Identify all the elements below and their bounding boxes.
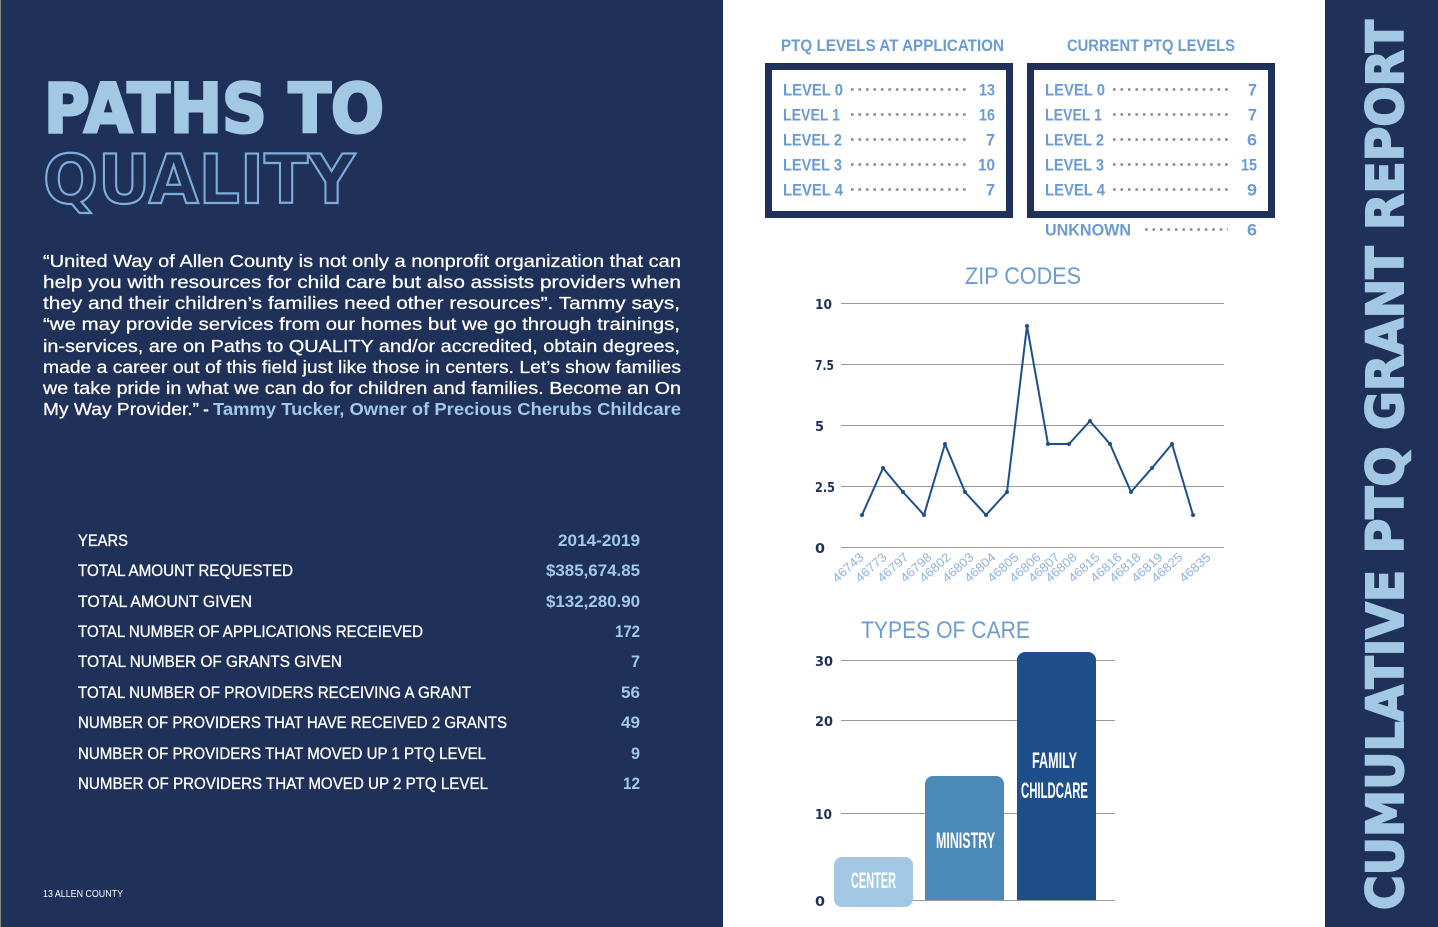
line chart: zip codes: 46798 — [898, 550, 935, 585]
panel: PTQ levels at application — [768, 37, 1010, 214]
panel: current PTQ levels: 7 — [1248, 82, 1257, 100]
title — [43, 70, 384, 220]
statistics table: 7 — [631, 653, 640, 671]
line chart: zip codes: 46773 — [853, 550, 890, 585]
line chart: zip codes — [815, 297, 1224, 585]
statistics table: 9 — [631, 745, 640, 763]
bar: family childcare: CHILDCARE — [1021, 778, 1088, 803]
bar chart: types of care — [815, 652, 1115, 910]
panel: PTQ levels at application: LEVEL 4 — [783, 182, 844, 200]
panel: PTQ levels at application: 10 — [978, 156, 995, 174]
panel: current PTQ levels: 7 — [1248, 106, 1257, 124]
line chart: zip codes: 0 — [815, 541, 825, 557]
line chart: zip codes: 46816 — [1088, 550, 1125, 585]
line chart: zip codes: 46818 — [1107, 550, 1144, 585]
line chart: zip codes: 5 — [815, 419, 824, 435]
line chart: zip codes: 7.5 — [815, 358, 834, 374]
panel: PTQ levels at application: 16 — [979, 106, 995, 124]
bar: family childcare — [1017, 652, 1096, 900]
line chart: zip codes: 46802 — [917, 550, 954, 585]
statistics table: NUMBER OF PROVIDERS THAT MOVED UP 1 PTQ LEVEL — [78, 745, 486, 763]
text block: quote: Tammy Tucker, Owner of Precious Cherubs Childcare — [213, 399, 681, 419]
statistics table: 56 — [621, 684, 640, 702]
statistics table: TOTAL NUMBER OF GRANTS GIVEN — [78, 653, 342, 671]
panel: current PTQ levels: LEVEL 2 — [1045, 132, 1104, 150]
line chart: zip codes: 46815 — [1066, 550, 1103, 585]
bar chart: types of care: 20 — [815, 714, 833, 730]
panel: left navy background — [0, 0, 723, 927]
heading: types of care: TYPES OF CARE — [861, 617, 1030, 644]
heading: zip codes: ZIP CODES — [965, 263, 1081, 290]
line chart: zip codes: 10 — [815, 297, 832, 313]
panel: current PTQ levels: LEVEL 0 — [1045, 82, 1105, 100]
text block: quote: “we may provide services from our homes but we go through trainings, — [43, 314, 680, 334]
text block: quote: we take pride in what we can do for children and families. Become an On — [42, 378, 681, 398]
statistics table: $385,674.85 — [546, 562, 640, 580]
footer page label: 13 ALLEN COUNTY — [43, 889, 123, 900]
line chart: zip codes: 46803 — [940, 550, 977, 585]
panel: PTQ levels at application: 13 — [979, 82, 995, 100]
statistics table: TOTAL AMOUNT REQUESTED — [78, 562, 293, 580]
panel: current PTQ levels: 15 — [1241, 156, 1257, 174]
text block: quote: “United Way of Allen County is not only a nonprofit organization that can — [43, 251, 681, 271]
bar: center — [834, 857, 913, 907]
bar chart: types of care: 0 — [815, 894, 825, 910]
line chart: zip codes: 46804 — [962, 550, 999, 585]
line chart: zip codes: 46743 — [830, 550, 867, 585]
title: QUALITY — [43, 141, 356, 220]
statistics table: TOTAL AMOUNT GIVEN — [78, 593, 252, 611]
statistics table: TOTAL NUMBER OF PROVIDERS RECEIVING A GRANT — [78, 684, 471, 702]
bar: center: CENTER — [851, 868, 896, 893]
statistics table: YEARS — [78, 532, 128, 550]
statistics table: 2014-2019 — [558, 532, 640, 550]
panel: current PTQ levels: LEVEL 4 — [1045, 182, 1106, 200]
line chart: zip codes: 46835 — [1177, 550, 1214, 585]
line chart: zip codes: 46805 — [985, 550, 1022, 585]
panel: PTQ levels at application: 7 — [986, 182, 995, 200]
panel: current PTQ levels: LEVEL 3 — [1045, 156, 1104, 174]
statistics table: $132,280.90 — [546, 593, 640, 611]
statistics table: NUMBER OF PROVIDERS THAT MOVED UP 2 PTQ LEVEL — [78, 775, 488, 793]
panel: current PTQ levels: CURRENT PTQ LEVELS — [1067, 37, 1235, 55]
panel: PTQ levels at application: PTQ LEVELS AT APPLICATION — [781, 37, 1004, 55]
text block: quote: in-services, are on Paths to QUALITY and/or accredited, obtain degrees, — [43, 336, 680, 356]
text block: quote: they and their children’s families need other resources”. Tammy says, — [43, 293, 680, 313]
bar: ministry — [925, 776, 1004, 900]
panel: current PTQ levels: UNKNOWN — [1045, 222, 1131, 240]
line chart: zip codes: 46797 — [875, 550, 912, 585]
panel: current PTQ levels — [1030, 37, 1272, 240]
bar chart: types of care: 30 — [815, 654, 833, 670]
panel: PTQ levels at application: LEVEL 1 — [783, 106, 840, 124]
line chart: zip codes: 46825 — [1149, 550, 1186, 585]
line chart: zip codes: 46806 — [1007, 550, 1044, 585]
bar: family childcare: FAMILY — [1032, 748, 1077, 773]
statistics table — [78, 532, 640, 793]
panel: current PTQ levels: 6 — [1247, 132, 1257, 150]
text block: quote — [42, 251, 681, 419]
line chart: zip codes: 46819 — [1129, 550, 1166, 585]
statistics table: TOTAL NUMBER OF APPLICATIONS RECEIEVED — [78, 623, 423, 641]
statistics table: 49 — [621, 714, 640, 732]
line chart: zip codes: 46808 — [1043, 550, 1080, 585]
statistics table: 12 — [623, 775, 640, 793]
line chart: zip codes: 2.5 — [815, 480, 835, 496]
panel: current PTQ levels: LEVEL 1 — [1045, 106, 1102, 124]
statistics table: NUMBER OF PROVIDERS THAT HAVE RECEIVED 2 GRANTS — [78, 714, 507, 732]
bar: ministry: MINISTRY — [936, 828, 995, 853]
panel: PTQ levels at application: LEVEL 3 — [783, 156, 842, 174]
text block: quote: help you with resources for child care but also assists providers when — [43, 272, 681, 292]
text block: quote: My Way Provider.” — [43, 399, 199, 419]
line chart: zip codes: 46807 — [1026, 550, 1063, 585]
panel: PTQ levels at application: 7 — [986, 132, 995, 150]
text block: quote: made a career out of this field just like those in centers. Let’s show families — [43, 357, 681, 377]
panel: current PTQ levels: 6 — [1247, 222, 1257, 240]
panel: right navy side band — [1325, 0, 1438, 927]
statistics table: 172 — [615, 623, 640, 641]
panel: PTQ levels at application: LEVEL 2 — [783, 132, 842, 150]
bar chart: types of care: 10 — [815, 807, 832, 823]
panel: PTQ levels at application: LEVEL 0 — [783, 82, 843, 100]
title: PATHS TO — [44, 70, 384, 149]
panel: current PTQ levels: 9 — [1247, 182, 1257, 200]
text block: quote: - — [203, 399, 209, 419]
